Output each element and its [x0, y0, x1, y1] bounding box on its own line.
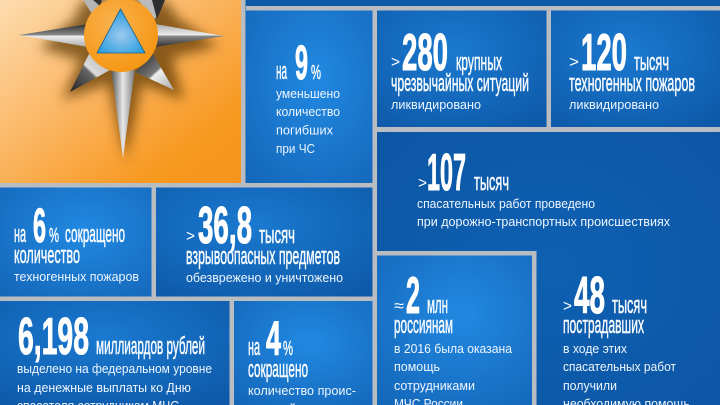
panel: 107 thousand rescues and 48 thousand victims — [377, 132, 720, 405]
panel: 36.8 thousand explosives: 36,8 — [198, 197, 252, 255]
panel: 2 million helped: помощь — [394, 359, 440, 374]
panel: 2 million helped: млн — [427, 292, 448, 319]
panel: fires reduced 6%: % — [49, 225, 59, 247]
panel: 6.198 billion roubles — [0, 301, 230, 405]
panel: 107 thousand rescues and 48 thousand victims: при дорожно-транспортных происшествиях — [417, 214, 670, 229]
panel: 280 emergencies: ликвидировано — [391, 97, 481, 112]
panel: 107 thousand rescues and 48 thousand victims: в ходе этих — [563, 341, 627, 356]
panel: 6.198 billion roubles: 6,198 — [18, 308, 89, 366]
panel: 2 million helped: ≈ — [394, 298, 404, 315]
panel: 107 thousand rescues and 48 thousand victims: спасательных работ проведено — [417, 196, 595, 211]
icon: triangle — [97, 9, 145, 53]
panel: deaths reduced: % — [311, 62, 321, 84]
panel: deaths reduced: на — [276, 58, 287, 85]
panel: incidents reduced 4%: % — [283, 338, 293, 360]
panel: 36.8 thousand explosives: тысяч — [259, 222, 295, 249]
panel: fires reduced 6%: на — [14, 221, 26, 248]
panel: 36.8 thousand explosives: взрывоопасных предметов — [186, 243, 340, 270]
panel: 36.8 thousand explosives: обезврежено и уничтожено — [186, 270, 343, 285]
panel: incidents reduced 4%: 4 — [266, 313, 281, 366]
panel: 120 thousand fires: ликвидировано — [569, 97, 659, 112]
panel: top strip — [246, 0, 720, 6]
panel: 107 thousand rescues and 48 thousand victims: 48 — [574, 267, 605, 325]
panel: 36.8 thousand explosives: > — [186, 228, 195, 245]
panel: 107 thousand rescues and 48 thousand victims: тысяч — [474, 169, 509, 196]
panel: 107 thousand rescues and 48 thousand victims: тысяч — [612, 292, 647, 319]
panel: 120 thousand fires: тысяч — [634, 49, 669, 76]
panel: 6.198 billion roubles: на денежные выплаты ко Дню — [17, 380, 191, 395]
panel: incidents reduced 4%: на — [248, 334, 260, 361]
panel: 107 thousand rescues and 48 thousand victims: 107 — [427, 144, 466, 202]
panel: 2 million helped: россиянам — [394, 312, 453, 339]
panel: fires reduced 6%: сокращено — [65, 221, 125, 248]
panel: 2 million helped: в 2016 была оказана — [394, 341, 513, 356]
panel: deaths reduced: 9 — [295, 37, 308, 90]
panel: fires reduced 6% — [0, 187, 152, 297]
panel: 36.8 thousand explosives — [156, 187, 373, 297]
panel: 280 emergencies: крупных — [456, 49, 502, 76]
panel: fires reduced 6%: 6 — [33, 200, 46, 253]
panel: 107 thousand rescues and 48 thousand victims: > — [418, 175, 427, 192]
panel: deaths reduced: количество — [276, 104, 340, 119]
panel: deaths reduced: уменьшено — [276, 86, 340, 101]
panel: 280 emergencies — [377, 10, 547, 128]
panel: incidents reduced 4%: количество проис- — [248, 383, 356, 398]
panel: 2 million helped — [377, 255, 533, 405]
panel: fires reduced 6%: количество — [14, 242, 80, 269]
panel: 280 emergencies: > — [391, 54, 400, 71]
panel: incidents reduced 4%: сокращено — [248, 356, 308, 383]
panel: incidents reduced 4% — [234, 301, 373, 405]
panel: 280 emergencies: чрезвычайных ситуаций — [391, 70, 529, 97]
panel: 107 thousand rescues and 48 thousand victims: получили — [563, 378, 617, 393]
panel: 6.198 billion roubles: миллиардов рублей — [96, 333, 205, 360]
panel: fires reduced 6%: техногенных пожаров — [14, 269, 139, 284]
panel: deaths reduced — [246, 10, 373, 183]
panel: deaths reduced: погибших — [276, 122, 333, 138]
panel: 107 thousand rescues and 48 thousand victims: пострадавших — [563, 312, 644, 339]
panel: 107 thousand rescues and 48 thousand victims: > — [563, 298, 572, 315]
panel: 280 emergencies: 280 — [402, 24, 448, 82]
icon: emblem star — [19, 0, 224, 160]
panel: 120 thousand fires: 120 — [581, 24, 627, 82]
panel: deaths reduced: при ЧС — [276, 141, 315, 156]
panel: 107 thousand rescues and 48 thousand victims: спасательных работ — [563, 359, 676, 374]
panel: emblem background — [0, 0, 241, 183]
panel: 2 million helped: 2 — [406, 267, 420, 325]
panel: 6.198 billion roubles: выделено на федеральном уровне — [17, 361, 212, 376]
panel: 120 thousand fires — [551, 10, 720, 128]
panel: 120 thousand fires: > — [569, 54, 579, 71]
panel: 2 million helped: сотрудниками — [394, 378, 475, 393]
